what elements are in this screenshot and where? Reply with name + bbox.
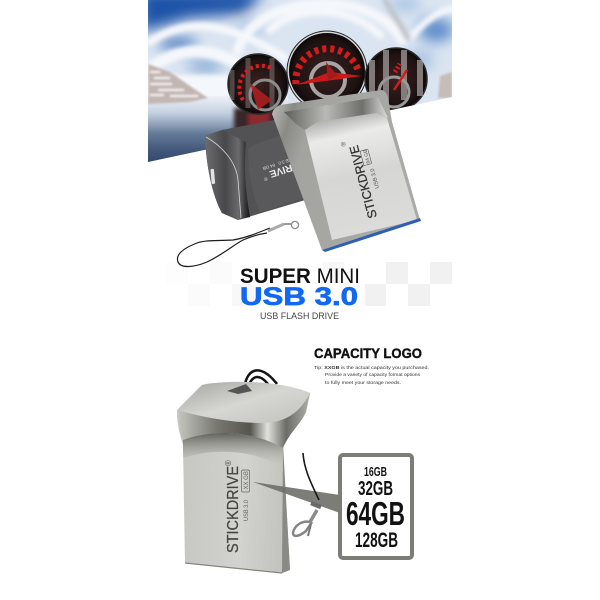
capacity badge: XX GB [244, 471, 250, 490]
usb drive: dark rear unit: ® [263, 175, 269, 183]
blue usb connector edge [322, 218, 421, 252]
lanyard strap and clasp, upper [177, 221, 299, 267]
hero photo: sky, sea and speedometers [140, 0, 454, 165]
heading: capacity logo: CAPACITY LOGO [314, 345, 422, 361]
registered mark: ® [339, 141, 348, 148]
usb drive: silver front unit [272, 90, 421, 252]
usb drive: silver front unit: USB 3.0 [370, 168, 381, 189]
tip text [314, 365, 429, 386]
128GB: 128GB [355, 529, 398, 552]
distant snowy town [148, 64, 452, 104]
brand text: STICKDRIVE [347, 144, 380, 220]
subtitle: USB FLASH DRIVE [260, 311, 339, 321]
gauge: right [365, 48, 427, 110]
sea [148, 96, 288, 165]
callout pointer to capacity badge [253, 482, 340, 513]
capacity badge [360, 148, 372, 166]
gauge: left [228, 54, 288, 132]
usb 3.0 label: USB 3.0 [243, 500, 250, 521]
lanyard strap and clasp, lower [293, 453, 321, 536]
checker pattern behind title [166, 262, 452, 306]
gauge: centre [287, 31, 367, 111]
capacity logo panel [340, 455, 412, 558]
rotated text on dark unit: DRIVE [268, 159, 300, 179]
title: usb 3.0: USB 3.0 [240, 283, 358, 311]
side edge [282, 446, 290, 573]
32GB: 32GB [358, 478, 393, 500]
title: super mini: SUPER MINI [240, 265, 360, 288]
cap top [177, 382, 310, 423]
sky swooshes [148, 0, 452, 88]
usb port slot [210, 169, 215, 184]
64GB: 64GB [346, 495, 405, 532]
brand text: STICKDRIVE [225, 466, 242, 553]
cap band [177, 393, 310, 448]
registered mark: ® [224, 460, 233, 466]
16GB: 16GB [364, 464, 387, 479]
tip text: Tip: XXGB is the actual capacity you purchased. [314, 365, 429, 371]
usb drive: dark rear unit: USB 3.0 64 GB [262, 156, 295, 171]
lanyard loop, lower [244, 370, 277, 392]
capacity badge: 64 GB [362, 148, 372, 164]
capacity badge [242, 470, 250, 492]
blue sky patches [140, 0, 454, 74]
usb drive: dark rear unit [205, 118, 312, 220]
tip text: to fully meet your storage needs. [325, 380, 401, 386]
usb drive: lower silver unit [177, 382, 310, 573]
tip text: Provide a variety of capacity format options [325, 372, 421, 378]
lanyard hole [227, 384, 252, 394]
body shadow under cap [183, 433, 284, 470]
